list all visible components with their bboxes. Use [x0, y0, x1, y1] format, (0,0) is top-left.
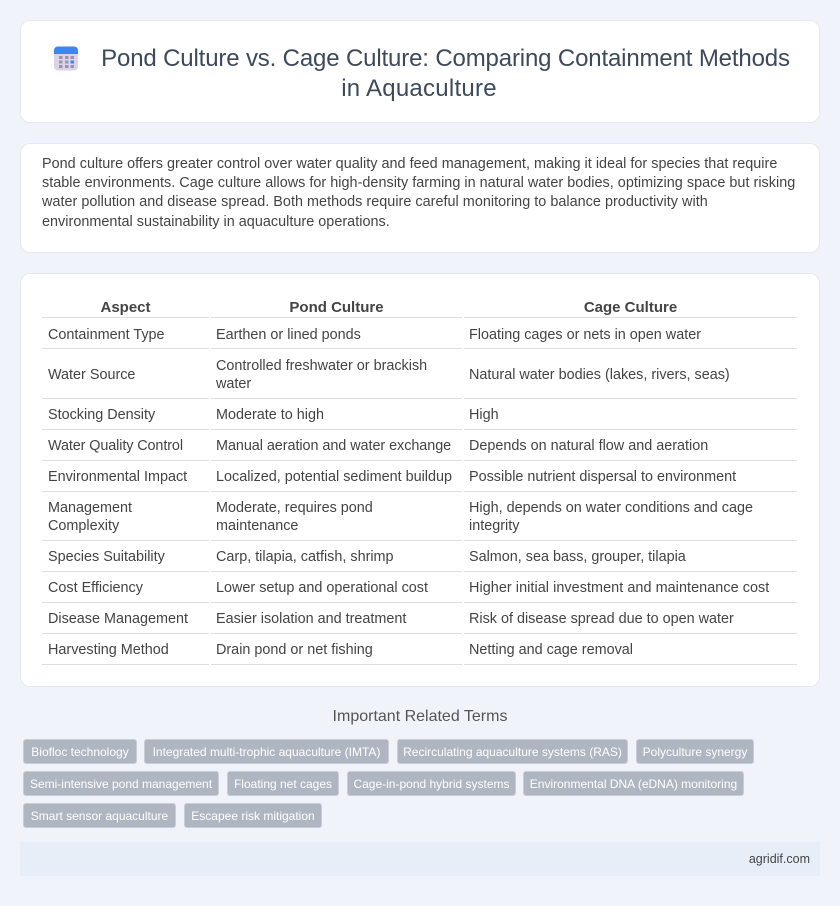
- row: management complexity: integrity: [469, 518, 519, 534]
- row: management complexity: Moderate, requires pond: [216, 500, 373, 516]
- tag: Environmental DNA (eDNA) monitoring: [530, 777, 737, 791]
- tag: [23, 803, 176, 828]
- table header: Aspect: [100, 299, 151, 316]
- title: in Aquaculture: [341, 75, 497, 102]
- related terms tags: [23, 739, 754, 828]
- row: cost efficiency: Lower setup and operational cost: [216, 580, 428, 596]
- tag: [227, 771, 339, 796]
- icon: calendar: [54, 46, 78, 70]
- footer bar: [20, 842, 820, 876]
- row: harvesting method: Drain pond or net fishing: [216, 642, 373, 658]
- tag: [23, 739, 137, 764]
- related terms heading: Important Related Terms: [333, 708, 507, 725]
- tag: [636, 739, 754, 764]
- row: environmental impact: Possible nutrient dispersal to environment: [469, 469, 736, 485]
- row: management complexity: High, depends on water conditions and cage: [469, 500, 753, 516]
- header card: [20, 20, 820, 123]
- row: disease management: Easier isolation and treatment: [216, 611, 406, 627]
- summary text: Pond culture offers greater control over water quality and feed management, making it ideal for species that require: [42, 156, 777, 172]
- row: containment type: Floating cages or nets in open water: [469, 327, 701, 343]
- row: water source: Water Source: [48, 367, 135, 383]
- row: water source: Natural water bodies (lakes, rivers, seas): [469, 367, 730, 383]
- row: water quality control: Water Quality Control: [48, 438, 183, 454]
- table header: Pond Culture: [289, 299, 384, 316]
- row: harvesting method: Harvesting Method: [48, 642, 169, 658]
- row: management complexity: maintenance: [216, 518, 298, 534]
- row: disease management: [48, 611, 734, 627]
- table header: Cage Culture: [584, 299, 677, 316]
- row: management complexity: [48, 500, 753, 534]
- tag: [523, 771, 744, 796]
- row: management complexity: Management: [48, 500, 132, 516]
- tag: Recirculating aquaculture systems (RAS): [403, 745, 622, 759]
- row: containment type: Containment Type: [48, 327, 165, 343]
- row: stocking density: Stocking Density: [48, 407, 155, 423]
- tag: Integrated multi-trophic aquaculture (IMTA): [153, 745, 380, 759]
- tag: [23, 771, 219, 796]
- summary text: [42, 156, 795, 230]
- row: disease management: Risk of disease spread due to open water: [469, 611, 734, 627]
- row: species suitability: Salmon, sea bass, grouper, tilapia: [469, 549, 686, 565]
- table header: [100, 299, 677, 316]
- tag: Polyculture synergy: [643, 745, 747, 759]
- tag: [397, 739, 628, 764]
- row: species suitability: Species Suitability: [48, 549, 165, 565]
- row: water quality control: [48, 438, 708, 454]
- row: stocking density: [48, 407, 499, 423]
- row: containment type: [48, 327, 701, 343]
- row: environmental impact: Environmental Impact: [48, 469, 187, 485]
- tag: Escapee risk mitigation: [191, 809, 315, 823]
- summary card: [20, 143, 820, 253]
- footer source: agridif.com: [749, 852, 810, 866]
- row: water quality control: Manual aeration and water exchange: [216, 438, 451, 454]
- summary text: stable environments. Cage culture allows for high-density farming in natural water bodies, optimizing space but risking: [42, 175, 795, 191]
- row: stocking density: High: [469, 407, 499, 423]
- tag: Semi-intensive pond management: [30, 777, 212, 791]
- row: harvesting method: Netting and cage removal: [469, 642, 633, 658]
- row: environmental impact: Localized, potential sediment buildup: [216, 469, 452, 485]
- row: disease management: Disease Management: [48, 611, 188, 627]
- comparison table card: [20, 273, 820, 687]
- tag: Biofloc technology: [31, 745, 129, 759]
- summary text: environmental sustainability in aquaculture operations.: [42, 214, 390, 230]
- tag: [144, 739, 389, 764]
- row: cost efficiency: Cost Efficiency: [48, 580, 143, 596]
- tag: [347, 771, 516, 796]
- title: Pond Culture vs. Cage Culture: Comparing Containment Methods: [101, 45, 790, 72]
- row: water quality control: Depends on natural flow and aeration: [469, 438, 708, 454]
- row: cost efficiency: [48, 580, 770, 596]
- row: harvesting method: [48, 642, 633, 658]
- tag: [184, 803, 322, 828]
- title: [101, 45, 790, 102]
- tag: Smart sensor aquaculture: [31, 809, 168, 823]
- row: species suitability: Carp, tilapia, catfish, shrimp: [216, 549, 394, 565]
- row: water source: [48, 358, 730, 392]
- tag: Floating net cages: [234, 777, 332, 791]
- row: water source: water: [216, 376, 251, 392]
- row: cost efficiency: Higher initial investment and maintenance cost: [469, 580, 769, 596]
- row: containment type: Earthen or lined ponds: [216, 327, 361, 343]
- row: stocking density: Moderate to high: [216, 407, 324, 423]
- row: environmental impact: [48, 469, 736, 485]
- row: management complexity: Complexity: [48, 518, 119, 534]
- row: species suitability: [48, 549, 686, 565]
- row: water source: Controlled freshwater or brackish: [216, 358, 427, 374]
- summary text: water pollution and disease spread. Both methods require careful monitoring to balance productivity with: [42, 194, 708, 210]
- tag: Cage-in-pond hybrid systems: [353, 777, 510, 791]
